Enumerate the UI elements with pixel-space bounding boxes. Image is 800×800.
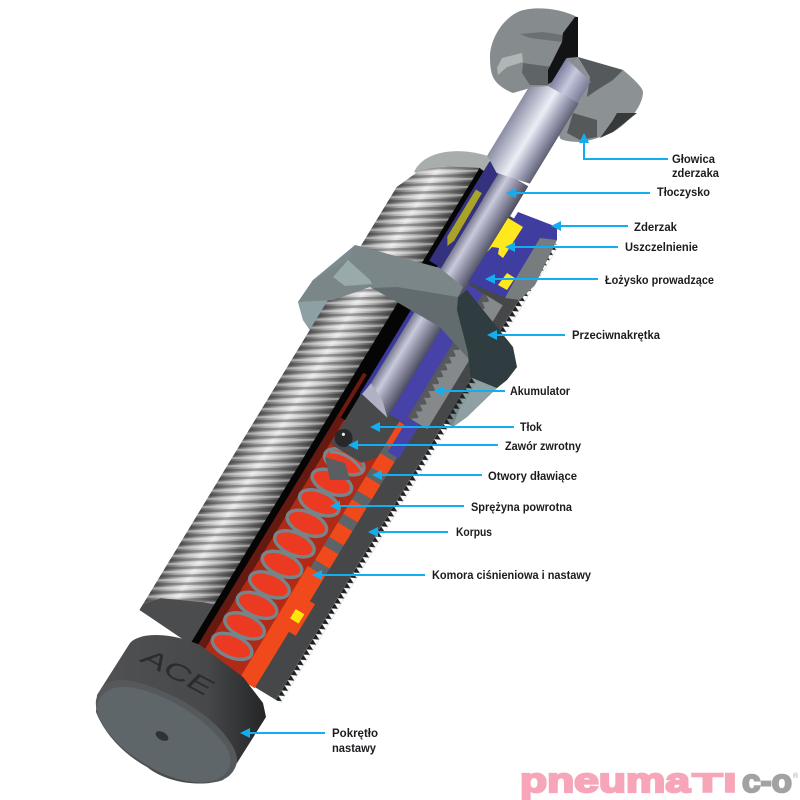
accumulator [408,293,503,429]
callout: Pokrętło nastawy: Pokrętło [332,728,378,740]
sealing [487,218,523,258]
body section [202,198,559,703]
callout: Głowica zderzaka [579,133,720,180]
orange strip with throttle openings [239,420,419,692]
threaded cap top ring [414,151,491,178]
knob lettering ACE: ACE [135,641,218,703]
callout: Zderzak: Zderzak [634,222,678,234]
knob end rim [96,680,237,783]
callout: Tłoczysko [506,187,710,199]
stop head [490,8,643,142]
callout: Otwory dławiące: Otwory dławiące [488,471,577,483]
piston rod lower [360,170,528,418]
upper body gray section [505,238,557,300]
callout: Korpus: Korpus [456,527,492,539]
callout: Akumulator: Akumulator [510,386,570,398]
logo: pneumatico: TI [692,768,737,798]
check valve ball [331,426,356,450]
callout: Sprężyna powrotna [330,501,573,514]
callout: Przeciwnakrętka [487,330,661,342]
logo: pneumatico: ® [793,772,799,780]
callout: Pokrętło nastawy: nastawy [332,743,377,755]
logo: pneumatico: c-o [742,763,792,799]
nut: front band and faces [298,245,517,388]
callout: Zawór zwrotny: Zawór zwrotny [505,441,582,453]
callout: Akumulator [434,386,570,398]
guide bearing [498,273,515,290]
upper left purple wall [429,158,503,268]
callout: Uszczelnienie [505,242,698,254]
piston rod upper [482,77,579,191]
callout: Zawór zwrotny [348,440,582,453]
knob end face [97,687,230,782]
callout: Tłoczysko: Tłoczysko [657,187,710,199]
callout: Uszczelnienie: Uszczelnienie [625,242,698,254]
shock absorber body, axis-aligned group [136,18,644,704]
threaded barrel [138,136,481,645]
callout: Łożysko prowadzące [485,274,714,287]
callout: Korpus [368,527,492,539]
callout: Łożysko prowadzące: Łożysko prowadzące [605,275,714,287]
logo: pneumatico: pneuma [520,762,691,800]
callout: Sprężyna powrotna: Sprężyna powrotna [471,502,573,514]
knob hole [154,729,170,743]
nut: rear faces [298,245,517,427]
callout: Przeciwnakrętka: Przeciwnakrętka [572,330,661,342]
callout: Komora ciśnieniowa i nastawy [312,570,592,582]
callout: Komora ciśnieniowa i nastawy: Komora ciśnieniowa i nastawy [432,570,592,582]
purple seal housing lower [342,262,498,459]
callout: Tłok [370,422,543,434]
pressure chamber [196,373,411,677]
upper purple stop block [468,212,557,297]
callout: Otwory dławiące [372,470,577,483]
logo: pneumatico [520,762,799,800]
callout: Tłok: Tłok [520,422,543,434]
callout: Głowica zderzaka: zderzaka [672,168,720,180]
piston [331,393,402,468]
valve seat and washer [325,452,363,480]
callout: Głowica zderzaka: Głowica [672,154,716,166]
callout: Pokrętło nastawy [240,728,378,755]
return spring [206,438,371,670]
adjustment knob body [96,635,266,784]
rod end facet [358,382,398,418]
rod top stub [541,58,594,117]
slot between thread and cut [189,168,495,656]
callout: Zderzak [551,221,678,234]
